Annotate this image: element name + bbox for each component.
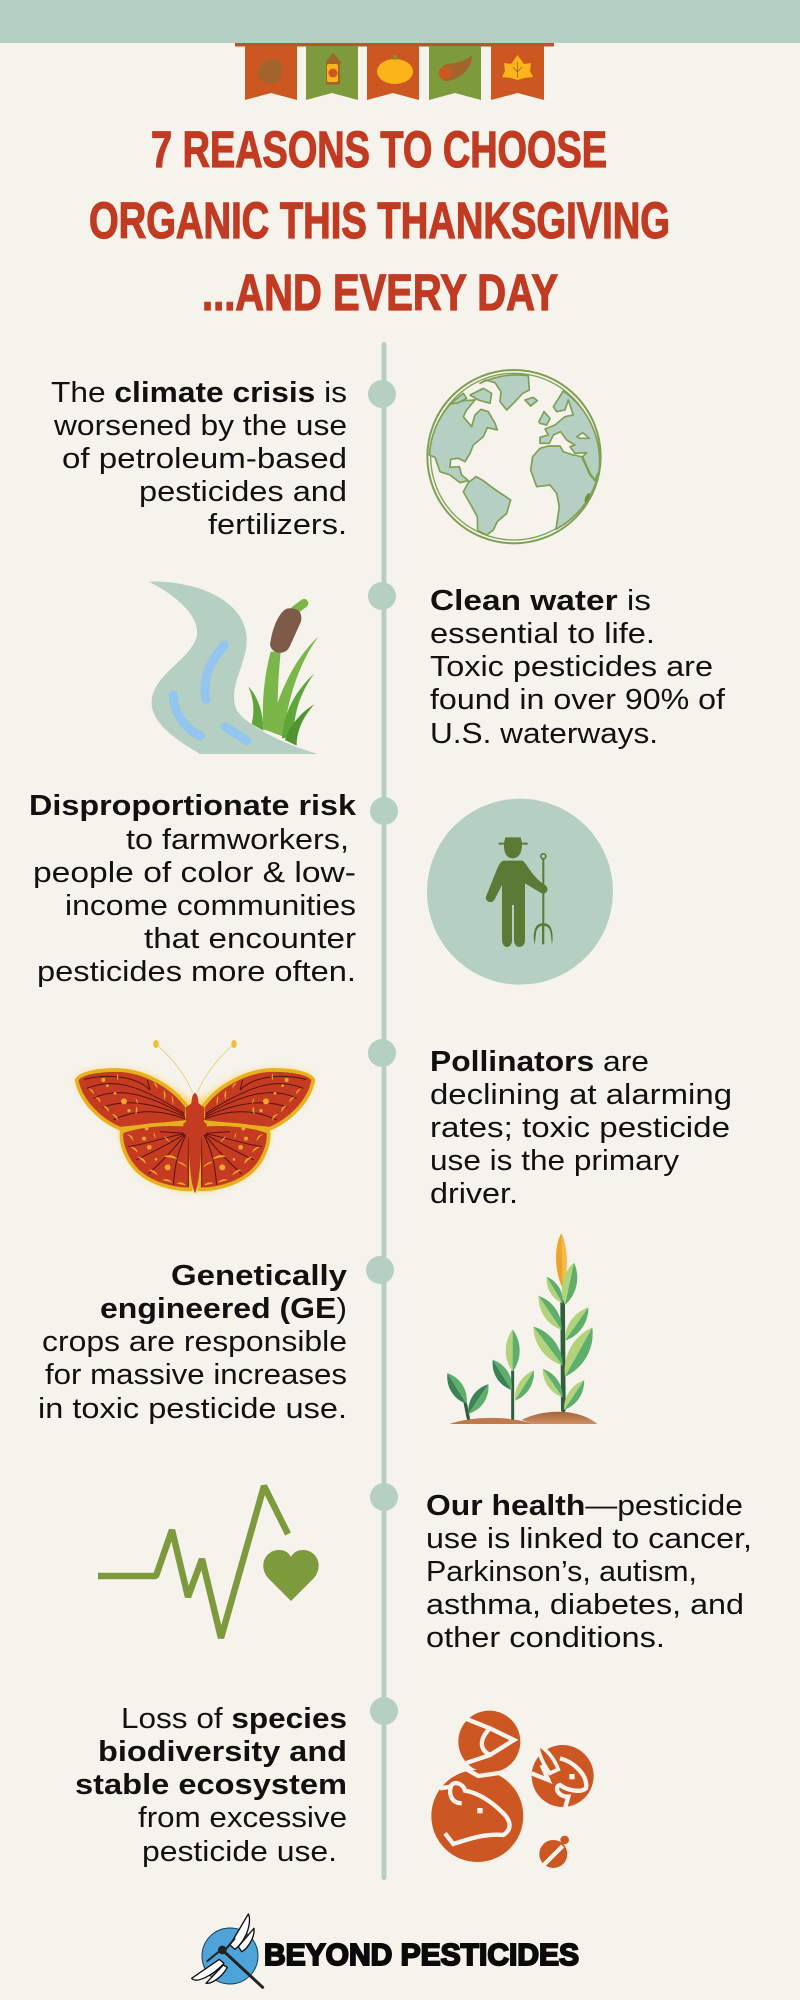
reason 7 text: species biodiversity: stable ecosystem [75, 1769, 347, 1801]
logo wordmark: BEYOND PESTICIDES [264, 1937, 579, 1972]
reason 3 text: disproportionate risk: income communities [65, 890, 356, 922]
reason 3 text: disproportionate risk [29, 790, 357, 988]
reason 5 text: genetically engineered crops: in toxic pesticide use. [38, 1393, 347, 1425]
reason 5 text: genetically engineered crops: for massive increases [45, 1359, 347, 1391]
reason 2 text: clean water [430, 585, 726, 750]
reason 7 text: species biodiversity: from excessive [138, 1802, 347, 1834]
reason 4 text: pollinators: declining at alarming [430, 1079, 732, 1111]
reason 2 text: clean water: Clean water is [430, 585, 651, 617]
reason 6 text: our health: use is linked to cancer, [426, 1523, 752, 1555]
reason 2 text: clean water: found in over 90% of [430, 684, 726, 716]
reason 5 text: genetically engineered crops: crops are responsible [42, 1326, 347, 1358]
reason 6 text: our health: asthma, diabetes, and [426, 1589, 744, 1621]
reason 3 text: disproportionate risk: to farmworkers, [126, 824, 349, 856]
reason 3 text: disproportionate risk: Disproportionate risk [29, 790, 357, 822]
icon: growing corn plants [442, 1233, 600, 1424]
logo mark: dragonfly on blue circle [192, 1914, 263, 1987]
reason 6 text: our health: Our health —pesticide [426, 1490, 743, 1522]
reason 6 text: our health [426, 1490, 752, 1654]
logo: Beyond Pesticides [192, 1914, 579, 1987]
icon: globe [427, 370, 601, 543]
reason 2 text: clean water: essential to life. [430, 618, 655, 650]
icon: animals [431, 1711, 594, 1868]
bunting with harvest icons [235, 43, 554, 100]
reason 1 text: climate crisis: The climate crisis is [51, 377, 347, 409]
reason 7 text: species biodiversity: pesticide use. [142, 1836, 337, 1868]
reason 1 text: climate crisis: fertilizers. [208, 509, 347, 541]
icon: farmworker with pitchfork [427, 799, 613, 985]
top band [0, 0, 800, 43]
flag: cornucopia [429, 46, 481, 100]
reason 4 text: pollinators: use is the primary [430, 1145, 680, 1177]
timeline [366, 342, 398, 1880]
reason 7 text: species biodiversity: biodiversity and [98, 1736, 347, 1768]
reason 4 text: pollinators: Pollinators are [430, 1046, 649, 1078]
icon: heartbeat line with heart [98, 1486, 319, 1638]
reason 2 text: clean water: U.S. waterways. [430, 718, 658, 750]
reason 4 text: pollinators [430, 1046, 732, 1210]
flag: pumpkin [367, 46, 419, 100]
reason 6 text: our health: other conditions. [426, 1622, 665, 1654]
reason 2 text: clean water: Toxic pesticides are [430, 651, 713, 683]
icon: butterfly [77, 1040, 313, 1193]
reason 6 text: our health: Parkinson’s, autism, [426, 1556, 697, 1588]
reason 3 text: disproportionate risk: that encounter [144, 923, 356, 955]
reason 3 text: disproportionate risk: pesticides more often. [37, 956, 356, 988]
reason 5 text: genetically engineered crops: Genetically [171, 1260, 347, 1292]
reason 7 text: species biodiversity: Loss of species [121, 1703, 347, 1735]
flag: acorn [245, 46, 297, 100]
flag: lantern [306, 46, 358, 100]
reason 5 text: genetically engineered crops: engineered (GE ) [100, 1293, 347, 1325]
title: ...AND EVERY DAY [202, 264, 558, 321]
title [89, 121, 670, 321]
reason 5 text: genetically engineered crops [38, 1260, 347, 1425]
reason 1 text: climate crisis: pesticides and [139, 476, 347, 508]
title: 7 REASONS TO CHOOSE [151, 121, 607, 178]
reason 4 text: pollinators: driver. [430, 1178, 518, 1210]
reason 3 text: disproportionate risk: people of color & low- [33, 857, 356, 889]
flag: maple leaf [491, 46, 544, 100]
icon: river and cattail [148, 582, 318, 754]
reason 4 text: pollinators: rates; toxic pesticide [430, 1112, 730, 1144]
reason 7 text: species biodiversity [75, 1703, 347, 1868]
reason 1 text: climate crisis: worsened by the use [53, 410, 347, 442]
reason 1 text: climate crisis [51, 377, 347, 541]
reason 1 text: climate crisis: of petroleum-based [62, 443, 347, 475]
